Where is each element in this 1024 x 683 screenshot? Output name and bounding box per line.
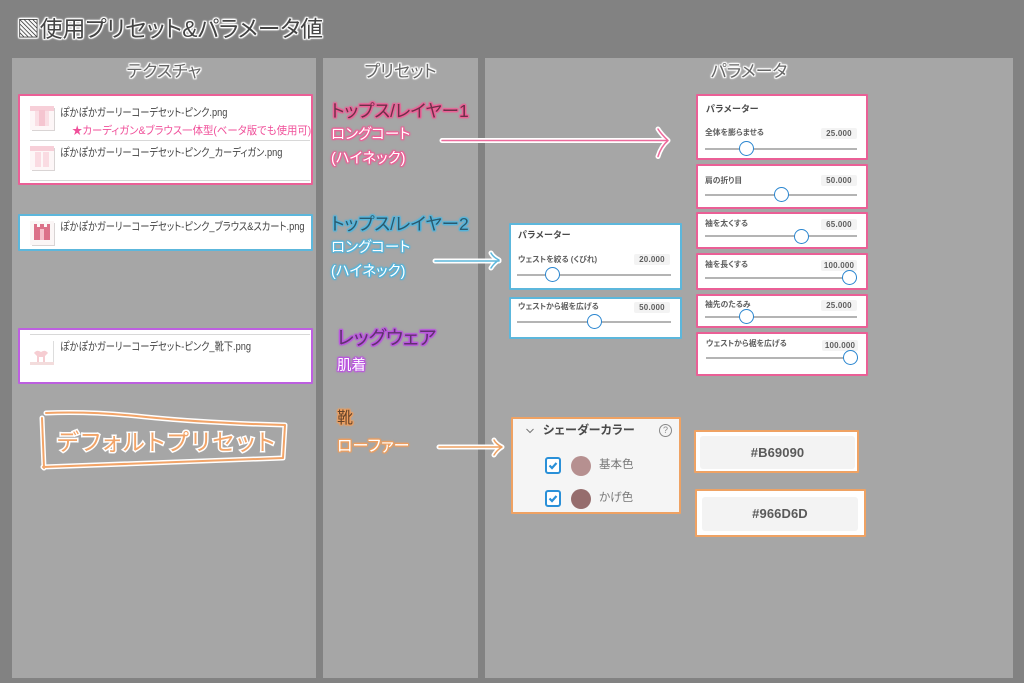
- slider track: [517, 274, 671, 276]
- preset title: レッグウェア: [337, 328, 436, 349]
- icon: help: ?: [663, 425, 668, 435]
- label: shadow color: かげ色: [599, 492, 633, 504]
- slider knob: [794, 229, 809, 244]
- preset note: (ハイネック): [331, 264, 405, 280]
- parameter card: sleeve thickness: [696, 212, 868, 249]
- callout: default preset: [40, 410, 288, 470]
- parameter value: [822, 340, 858, 351]
- swatch: shadow color: [571, 489, 591, 509]
- separator: [30, 334, 310, 335]
- icon: socks thumbnail: [30, 341, 54, 365]
- parameter card: bust: [696, 94, 868, 160]
- panel: preset: [323, 58, 478, 678]
- slider track: [705, 235, 857, 237]
- slider track: [517, 321, 671, 323]
- arrow: orange: [436, 438, 504, 458]
- preset name: ロングコート: [331, 127, 410, 143]
- heading: texture: テクスチャ: [127, 62, 201, 81]
- slider knob: [587, 314, 602, 329]
- parameter label: ウェストから裾を広げる: [706, 339, 787, 348]
- hex value: [700, 436, 855, 469]
- parameter value: 100.000: [825, 341, 855, 350]
- file name 4: ぽかぽかガーリーコーデセット-ピンク_靴下.png: [60, 341, 251, 353]
- parameter label: 肩の折り目: [705, 176, 742, 185]
- parameter value: 25.000: [826, 129, 852, 138]
- icon: texture thumbnail 2: [30, 146, 55, 171]
- parameter value: 50.000: [826, 176, 852, 185]
- slider track: [705, 194, 857, 196]
- label: default preset: デフォルトプリセット: [57, 429, 275, 455]
- parameter label: ウェストを絞る (くびれ): [518, 255, 597, 264]
- swatch: base color: [571, 456, 591, 476]
- preset: tops layer 1: [330, 100, 470, 168]
- arrow: blue: [432, 250, 502, 270]
- preset name: ロングコート: [331, 240, 410, 256]
- hex value: #966D6D: [752, 506, 808, 521]
- slider knob: [843, 350, 858, 365]
- file list: blue texture: [18, 214, 313, 251]
- parameter value: [821, 300, 857, 311]
- panel: parameters: [485, 58, 1013, 678]
- parameter card: sleeve length: [696, 253, 868, 290]
- parameter value: 25.000: [826, 301, 852, 310]
- icon: help: [659, 424, 672, 437]
- preset name: ローファー: [337, 438, 410, 455]
- parameter value: 50.000: [639, 303, 665, 312]
- parameter label: ウェストから裾を広げる: [518, 302, 599, 311]
- parameter value: 100.000: [824, 261, 854, 270]
- icon: texture thumbnail 1: [30, 106, 55, 131]
- parameter label: 袖を長くする: [705, 260, 748, 269]
- slider knob: [739, 141, 754, 156]
- parameter card: waist: [509, 223, 682, 290]
- slider track: [705, 148, 857, 150]
- separator: [30, 140, 310, 141]
- heading: preset: プリセット: [364, 62, 437, 81]
- parameter value: 65.000: [826, 220, 852, 229]
- parameter card: hem flare blue: [509, 297, 682, 339]
- card heading: パラメーター: [518, 230, 571, 240]
- color value: base: [694, 430, 859, 473]
- checkbox: shadow color: [545, 490, 561, 507]
- checkbox: base color: [545, 457, 561, 474]
- separator: [30, 180, 310, 181]
- slider track: [706, 357, 858, 359]
- hex value: #B69090: [751, 445, 804, 460]
- file name 1: ぽかぽかガーリーコーデセット-ピンク.png: [60, 107, 227, 119]
- preset note: (ハイネック): [331, 151, 405, 167]
- slider track: [705, 277, 857, 279]
- file list: pink textures: [18, 94, 313, 185]
- parameter card: hem flare pink: [696, 332, 868, 376]
- color value: shadow: [695, 489, 866, 537]
- panel: texture: [12, 58, 316, 678]
- parameter value: [821, 219, 857, 230]
- shader heading: シェーダーカラー: [543, 423, 635, 437]
- preset title: トップス/レイヤー1: [331, 101, 469, 121]
- title: ▧使用プリセット&パラメータ値: [17, 16, 323, 42]
- preset title: トップス/レイヤー2: [331, 214, 469, 234]
- preset title: 靴: [337, 410, 353, 427]
- file name 3: ぽかぽかガーリーコーデセット-ピンク_ブラウス&スカート.png: [60, 221, 305, 233]
- slider knob: [774, 187, 789, 202]
- parameter value: [821, 175, 857, 186]
- label: base color: 基本色: [599, 459, 634, 471]
- arrow: pink: [440, 126, 670, 159]
- hex value: [702, 497, 858, 531]
- hand-drawn frame: [42, 412, 285, 468]
- preset: legwear: [336, 326, 438, 374]
- parameter label: 袖先のたるみ: [705, 300, 751, 309]
- file list: purple texture: [18, 328, 313, 384]
- parameter value: [634, 302, 670, 313]
- icon: blouse thumbnail: [30, 221, 55, 246]
- panel: shader color: [511, 417, 681, 514]
- parameter label: 袖を太くする: [705, 219, 748, 228]
- parameter card: cuff slack: [696, 294, 868, 328]
- heading: parameters: パラメータ: [711, 62, 787, 81]
- preset: shoes: [336, 408, 410, 455]
- parameter value: [634, 254, 670, 265]
- slider knob: [739, 309, 754, 324]
- card heading: パラメーター: [706, 104, 759, 114]
- slider knob: [842, 270, 857, 285]
- icon: chevron: [526, 428, 534, 434]
- preset name: 肌着: [337, 358, 366, 374]
- parameter value: [821, 260, 857, 271]
- parameter card: shoulder fold: [696, 164, 868, 209]
- preset: tops layer 2: [330, 213, 470, 281]
- file name 2: ぽかぽかガーリーコーデセット-ピンク_カーディガン.png: [60, 147, 282, 159]
- slider track: [705, 316, 857, 318]
- parameter label: 全体を膨らませる: [705, 128, 764, 137]
- slider knob: [545, 267, 560, 282]
- handwritten note: ★カーディガン&ブラウス一体型(ベータ版でも使用可): [72, 125, 311, 137]
- parameter value: [821, 128, 857, 139]
- parameter value: 20.000: [639, 255, 665, 264]
